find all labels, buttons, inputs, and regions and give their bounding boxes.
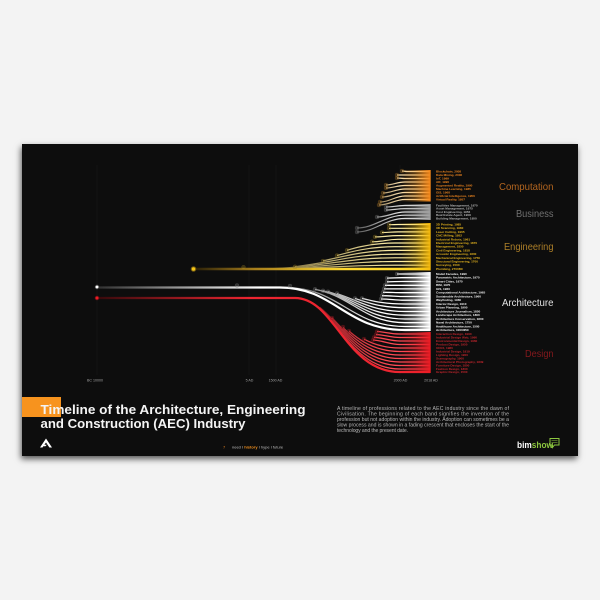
labels: computation professions: Artificial Intelligence, 1956 bbox=[436, 194, 475, 198]
labels: design professions: Lighting Design, 1900 bbox=[436, 353, 468, 357]
labels: design professions: Graphic Design, 1500 bbox=[436, 370, 468, 374]
labels: computation professions: Data Mining, 2006 bbox=[436, 173, 462, 177]
labels: design professions: Product Design, 1950 bbox=[436, 342, 468, 346]
footer navigation: need I history I hype I future bbox=[232, 444, 284, 449]
labels: architecture professions: Model Facades, 1990 bbox=[436, 272, 467, 276]
description text block: profession but not adoption within the industry. Adoption can sometimes be a bbox=[337, 417, 509, 423]
labels: architecture professions: Architecture Conservation, 1800 bbox=[436, 317, 484, 321]
axis labels: BC 10000 bbox=[87, 378, 103, 382]
labels: engineering professions: Laser Cutting, 1965 bbox=[436, 230, 465, 234]
footer navigation: 7 bbox=[223, 444, 226, 449]
labels: business professions: Asset Management, 1975 bbox=[436, 207, 473, 211]
labels: business professions: Real Estate Agent, 1908 bbox=[436, 213, 471, 217]
labels: business professions: Cost Engineering, 1956 bbox=[436, 210, 470, 214]
labels: architecture professions bbox=[436, 272, 486, 332]
axis labels: 2000 AD bbox=[394, 378, 408, 382]
chart: architecture band bbox=[95, 272, 431, 331]
axis labels: 5 AD bbox=[246, 378, 254, 382]
category label: Business: Business bbox=[516, 208, 554, 220]
labels: computation professions: Augmented Reality, 1990 bbox=[436, 184, 473, 188]
title: and Construction (AEC) Industry bbox=[40, 416, 246, 431]
description text block: A timeline of professions related to the AEC industry since the dawn of bbox=[337, 406, 510, 412]
labels: computation professions: AR, 1990 bbox=[436, 180, 449, 184]
labels: design professions: Industrial Design Web, 1990 bbox=[436, 336, 477, 340]
labels: engineering professions: 3D Scanning, 1980 bbox=[436, 226, 464, 230]
chart: design band bbox=[95, 296, 431, 373]
description text block: slow process and is shown in a fading crescent that encloses the start of the bbox=[337, 422, 509, 428]
labels: architecture professions: Architecture Journalism, 1850 bbox=[436, 310, 480, 314]
labels: business professions: Facilities Management, 1970 bbox=[436, 204, 478, 208]
labels: design professions bbox=[436, 332, 484, 374]
title: Timeline of the Architecture, Engineering bbox=[40, 402, 306, 417]
labels: computation professions bbox=[436, 170, 475, 202]
labels: architecture professions: Architecture, 10000BC bbox=[436, 328, 470, 332]
labels: engineering professions: Industrial Robots, 1961 bbox=[436, 237, 470, 241]
chart: business band bbox=[355, 204, 431, 234]
category label: Architecture: Architecture bbox=[502, 297, 554, 309]
labels: architecture professions: Sustainable Architecture, 1960 bbox=[436, 294, 481, 298]
labels: engineering professions: Surveying, 1500 bbox=[436, 263, 460, 267]
icon: A logo bbox=[40, 438, 52, 448]
labels: computation professions: Virtual Reality, 1957 bbox=[436, 198, 465, 202]
axis labels: 1500 AD bbox=[269, 378, 283, 382]
labels: design professions: Scenography, 1900 bbox=[436, 356, 464, 360]
labels: architecture professions: BIM, 1970 bbox=[436, 283, 451, 287]
description text block: Civilisation. The beginning of each band signifies the invention of the bbox=[337, 412, 509, 418]
labels: engineering professions: Plumbing, 2700BC bbox=[436, 267, 464, 271]
labels: computation professions: Blockchain, 2008 bbox=[436, 170, 461, 174]
chart: engineering band bbox=[191, 223, 431, 271]
labels: engineering professions: Civil Engineering, 1818 bbox=[436, 248, 470, 252]
labels: architecture professions: Urban Planning, 1900 bbox=[436, 306, 468, 310]
labels: architecture professions: Interior Design, 1910 bbox=[436, 302, 467, 306]
description text block: technology and the present date. bbox=[337, 428, 408, 434]
axis labels: 2018 AD bbox=[424, 378, 438, 382]
orange title accent bbox=[22, 397, 61, 417]
labels: engineering professions bbox=[436, 222, 480, 271]
labels: computation professions: IoT, 1999 bbox=[436, 176, 449, 180]
bimshow logo: bimshow bbox=[517, 440, 554, 450]
labels: design professions: Fashion Design, 1800 bbox=[436, 367, 468, 371]
labels: business professions bbox=[436, 204, 478, 220]
title bbox=[40, 402, 306, 431]
category label: Computation: Computation bbox=[499, 181, 554, 193]
labels: design professions: Furniture Design, 1800 bbox=[436, 364, 470, 368]
panel: dark poster background bbox=[22, 144, 578, 456]
labels: design professions: Interaction Design, 1990 bbox=[436, 332, 472, 336]
labels: computation professions: GIS, 1968 bbox=[436, 190, 450, 194]
labels: engineering professions: Structural Engineering, 1700 bbox=[436, 260, 478, 264]
labels: architecture professions: Wayfinding, 1960 bbox=[436, 298, 461, 302]
labels: architecture professions: Parametric Architecture, 1970 bbox=[436, 276, 480, 280]
labels: architecture professions: Landscape Architecture, 1800 bbox=[436, 313, 480, 317]
labels: engineering professions: Management, 1850 bbox=[436, 245, 464, 249]
description text block bbox=[337, 406, 510, 434]
labels: design professions: Industrial Design, 1919 bbox=[436, 350, 470, 354]
labels: computation professions: Machine Learning, 1985 bbox=[436, 187, 471, 191]
labels: architecture professions: Computational Architecture, 1965 bbox=[436, 291, 486, 295]
labels: engineering professions: CNC Milling, 1952 bbox=[436, 234, 462, 238]
labels: design professions: Environmental Design, 1960 bbox=[436, 339, 478, 343]
labels: design professions: UI/UX, 1980 bbox=[436, 346, 453, 350]
labels: architecture professions: Healthcare Architecture, 1500 bbox=[436, 324, 480, 328]
category label: Engineering: Engineering bbox=[504, 241, 554, 253]
labels: engineering professions: Mechanical Engineering, 1750 bbox=[436, 256, 480, 260]
labels: architecture professions: Naval Architecture, 1750 bbox=[436, 321, 472, 325]
axis labels bbox=[87, 378, 438, 382]
labels: architecture professions: GIS, 1960 bbox=[436, 287, 450, 291]
labels: engineering professions: Electrical Engineering, 1870 bbox=[436, 241, 477, 245]
labels: design professions: Architectural Photography, 1839 bbox=[436, 360, 484, 364]
chart: computation band bbox=[377, 169, 431, 207]
labels: architecture professions: Smart Cities, 1970 bbox=[436, 280, 463, 284]
labels: engineering professions: 3D Printing, 1985 bbox=[436, 222, 461, 226]
category label: Design: Design bbox=[525, 348, 554, 360]
labels: engineering professions: Acoustic Engineering, 1800 bbox=[436, 252, 477, 256]
labels: business professions: Building Management, 1950 bbox=[436, 216, 477, 220]
